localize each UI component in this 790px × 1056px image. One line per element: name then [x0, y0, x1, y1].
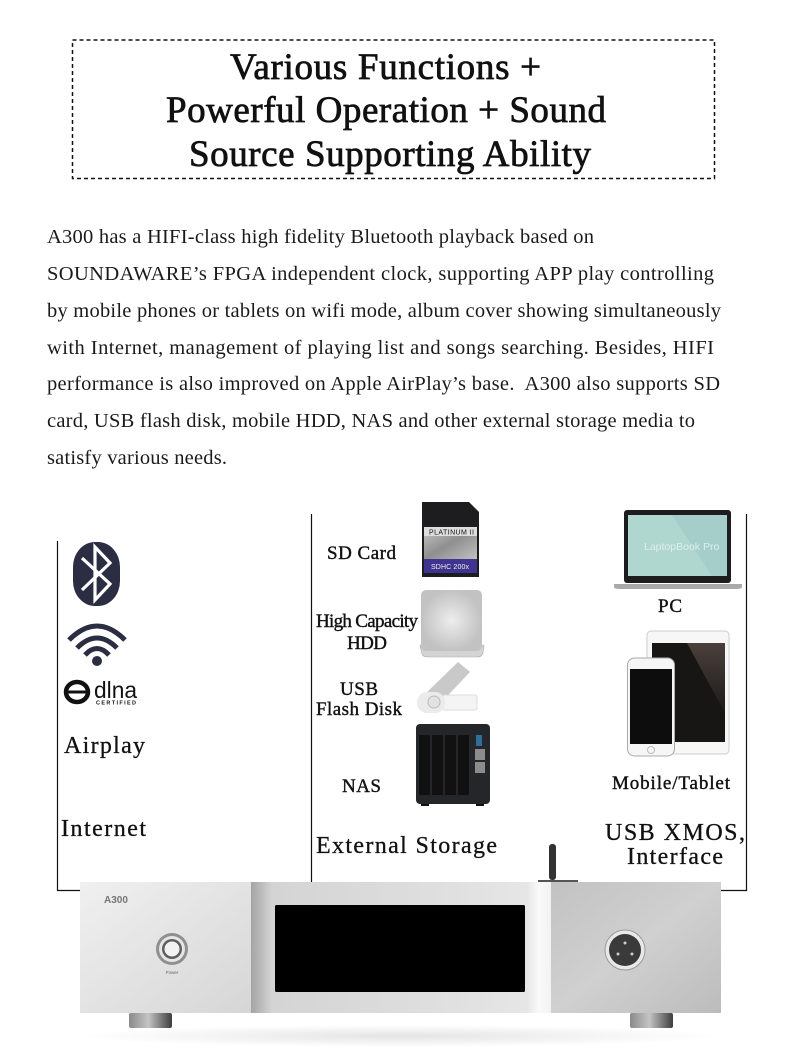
panel: external storage: [316, 502, 497, 859]
heading: External Storage: External Storage: [316, 833, 497, 859]
heading: USB XMOS, Interface: USB XMOS,: [605, 820, 745, 846]
panel: wireless sources: [61, 542, 146, 842]
device: A300 front panel: [80, 844, 721, 1047]
bracket lines linking sources to device: [58, 514, 746, 890]
icon: NAS enclosure: [416, 724, 490, 806]
power button: [156, 933, 188, 975]
label: Airplay: Airplay: [64, 733, 145, 759]
icon: dlna logo: dlna: [94, 677, 137, 703]
intro paragraph: satisfy various needs.: [47, 447, 227, 469]
intro paragraph: with Internet, management of playing list and songs searching. Besides, HIFI: [47, 337, 714, 359]
icon: SD card: PLATINUM II: [429, 530, 474, 536]
label: NAS: NAS: [342, 776, 381, 797]
model label: A300: [104, 895, 128, 906]
centre chassis: [251, 882, 551, 1013]
panel: USB XMOS interface: [605, 510, 745, 870]
intro paragraph: by mobile phones or tablets on wifi mode, album cover showing simultaneously: [47, 300, 722, 322]
icon: USB flash disk: [417, 662, 477, 713]
icon: dlna logo: [66, 677, 137, 706]
title: [72, 40, 714, 178]
icon: bluetooth: [73, 542, 120, 606]
label: SD Card: SD Card: [327, 543, 396, 564]
icon: SD card: SDHC 200x: [431, 564, 470, 571]
label: PC: PC: [658, 596, 682, 617]
intro paragraph: A300 has a HIFI-class high fidelity Bluetooth playback based on: [47, 226, 594, 248]
heading: USB XMOS, Interface: [605, 820, 745, 870]
title: Source Supporting Ability: [189, 134, 592, 175]
icon: tablet and phone: [628, 631, 729, 756]
icon: SD card: [422, 502, 479, 577]
panel: external storage: Flash Disk: [316, 699, 402, 720]
label: USB Flash Disk: USB: [340, 679, 378, 700]
icon: HDD: [420, 590, 484, 657]
black display: [275, 905, 525, 992]
title: Various Functions +: [230, 47, 541, 88]
intro paragraph: SOUNDAWARE’s FPGA independent clock, supporting APP play controlling: [47, 263, 714, 285]
icon: wifi: [69, 626, 125, 666]
heading: USB XMOS, Interface: Interface: [627, 844, 723, 870]
intro paragraph: performance is also improved on Apple AirPlay’s base. A300 also supports SD: [47, 373, 720, 395]
icon: laptop: [614, 510, 742, 589]
label: Internet: Internet: [61, 816, 146, 842]
intro paragraph: [47, 226, 722, 469]
right chassis: [551, 882, 721, 1013]
icon: laptop: LaptopBook Pro: [644, 541, 719, 553]
intro paragraph: card, USB flash disk, mobile HDD, NAS and other external storage media to: [47, 410, 695, 432]
label: Mobile/Tablet: Mobile/Tablet: [612, 773, 731, 794]
label: High Capacity HDD: High Capacity: [316, 611, 418, 632]
power button: Power: [166, 970, 179, 975]
floor shadow: [80, 1025, 720, 1047]
icon: dlna logo: CERTIFIED: [96, 700, 136, 706]
panel: external storage: HDD: [347, 633, 387, 654]
title: Powerful Operation + Sound: [166, 90, 606, 131]
feet: [129, 1013, 673, 1028]
headphone XLR jack: [605, 930, 645, 970]
antenna: [538, 844, 578, 882]
left chassis: [80, 882, 251, 1013]
